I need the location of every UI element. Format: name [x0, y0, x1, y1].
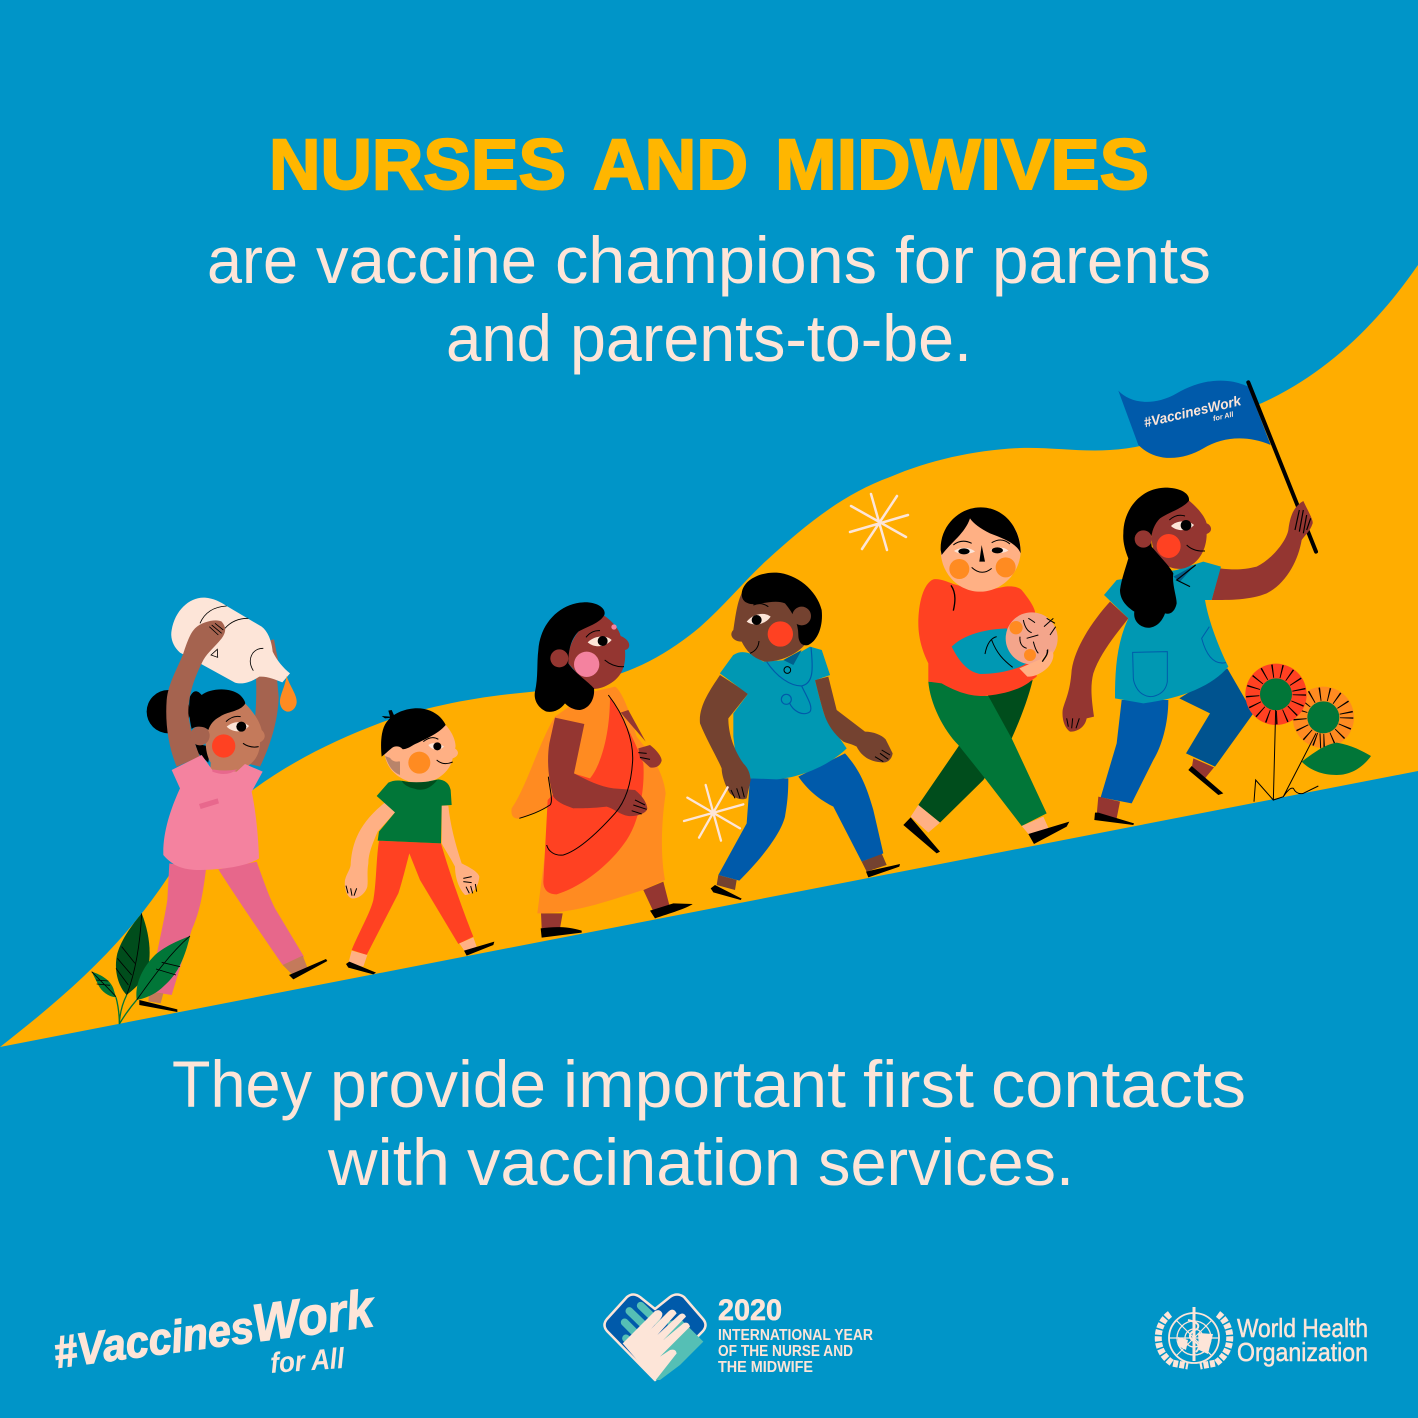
logo text: THE MIDWIFE [718, 1359, 813, 1376]
flowers [1245, 664, 1371, 802]
title: NURSES [269, 126, 566, 205]
figure: nurse holding flag [1062, 381, 1316, 825]
baby [952, 612, 1058, 677]
subtitle [207, 223, 1211, 375]
closing statement: important [563, 1047, 846, 1121]
logo text: OF THE NURSE AND [718, 1343, 853, 1360]
spark [850, 494, 908, 550]
subtitle: for [895, 223, 974, 297]
subtitle: parents [992, 223, 1211, 297]
hashtag logo: for All [269, 1343, 346, 1380]
closing statement: first [863, 1047, 974, 1121]
flag: #VaccinesWork [1142, 392, 1244, 430]
icon: WHO emblem [1158, 1307, 1230, 1366]
title: AND [593, 126, 748, 205]
closing statement [172, 1047, 1246, 1199]
logo: world health organization [1158, 1307, 1368, 1367]
figure: nurse with stethoscope [684, 573, 900, 900]
logo text: INTERNATIONAL YEAR [718, 1327, 873, 1344]
logo: international year of the nurse and the midwife [604, 1294, 873, 1381]
figure: pregnant woman in sari [511, 602, 693, 938]
flag: for All [1212, 409, 1235, 423]
organization name: World Health [1237, 1313, 1368, 1343]
drop [280, 676, 297, 712]
flag [1118, 381, 1316, 552]
closing statement: with [327, 1125, 450, 1199]
yellow hill [0, 265, 1418, 1047]
closing statement: vaccination [467, 1125, 801, 1199]
organization name [1237, 1313, 1368, 1367]
closing statement: contacts [991, 1047, 1246, 1121]
closing statement: provide [330, 1047, 546, 1121]
subtitle: parents-to-be. [570, 301, 972, 375]
pants [151, 862, 304, 995]
tunic [720, 647, 847, 779]
icon: heart with hands [604, 1294, 706, 1381]
figure: woman pouring bottle with plant [92, 598, 327, 1024]
closing statement: They [172, 1047, 312, 1121]
bottle [171, 598, 290, 683]
subtitle: and [446, 301, 552, 375]
figure: boy in green shirt [345, 708, 494, 974]
sari [511, 687, 666, 913]
plant [92, 913, 190, 1024]
organization name: Organization [1237, 1337, 1368, 1367]
subtitle: vaccine [316, 223, 537, 297]
shirt [163, 755, 263, 870]
spark [684, 785, 743, 841]
figure: mother carrying baby [903, 507, 1069, 853]
closing statement: services. [818, 1125, 1074, 1199]
year: 2020 [718, 1294, 782, 1327]
title [269, 126, 1149, 205]
hashtag logo: #VaccinesWork [50, 1279, 379, 1380]
trousers [718, 753, 883, 881]
title: MIDWIVES [775, 126, 1149, 205]
subtitle: champions [555, 223, 877, 297]
logo text [718, 1327, 873, 1376]
head [206, 703, 265, 777]
subtitle: are [207, 223, 298, 297]
